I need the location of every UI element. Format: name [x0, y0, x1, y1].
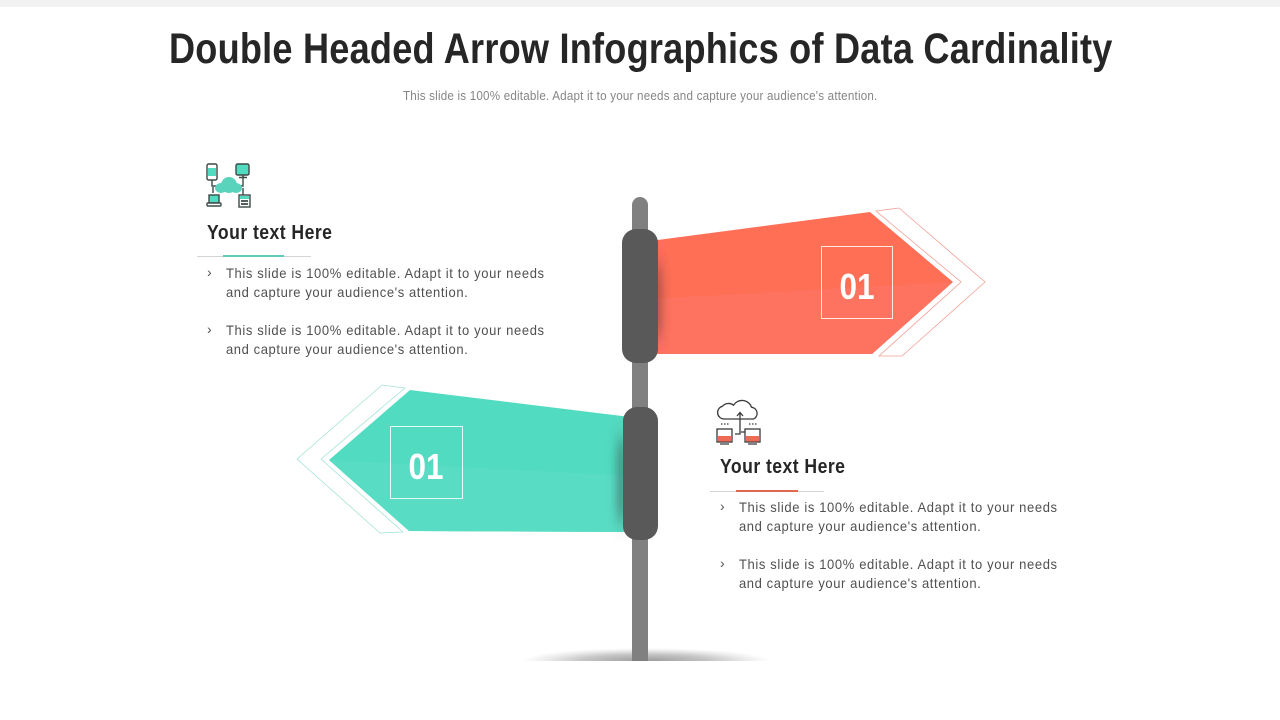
- subtitle: This slide is 100% editable. Adapt it to your needs and capture your audience's attention.: [403, 89, 877, 103]
- post clamp shadow: [654, 265, 668, 337]
- arrow body: [329, 390, 630, 532]
- arrow: left, teal 01: [297, 385, 658, 540]
- panel: bottom-right text: and capture your audience's attention.: [739, 519, 981, 534]
- arrow outline chevron: [876, 208, 985, 356]
- number box: [822, 246, 892, 318]
- panel: top-left text: and capture your audience's attention.: [226, 342, 468, 357]
- heading: Your text Here: [207, 221, 332, 243]
- icon: cloud with computers: [717, 400, 760, 444]
- divider: [197, 256, 311, 258]
- number box: [390, 426, 462, 498]
- bullet 1: ›: [207, 264, 212, 280]
- accent underline: [223, 255, 284, 257]
- top bar: [0, 0, 1280, 7]
- heading: Your text Here: [720, 455, 845, 477]
- arrow: right, orange 01: [622, 208, 985, 363]
- number: 01: [408, 446, 444, 487]
- arrow body: [650, 212, 953, 354]
- bullet 2: ›: [720, 555, 725, 571]
- panel: top-left text: and capture your audience's attention.: [226, 285, 468, 300]
- post clamp: [623, 407, 658, 540]
- divider: [710, 490, 824, 492]
- panel: top-left text: This slide is 100% editable. Adapt it to your needs: [226, 323, 544, 338]
- post clamp: [622, 229, 658, 363]
- bullet 2: ›: [207, 321, 212, 337]
- title: Double Headed Arrow Infographics of Data Cardinality: [169, 25, 1112, 73]
- bullet 1: ›: [720, 498, 725, 514]
- panel: top-left text: This slide is 100% editable. Adapt it to your needs: [226, 266, 544, 281]
- panel: top-left text: [197, 164, 544, 357]
- ground shadow: [522, 648, 770, 661]
- panel: bottom-right text: This slide is 100% editable. Adapt it to your needs: [739, 557, 1057, 572]
- icon: network cloud: [207, 164, 250, 207]
- post clamp shadow: [611, 440, 625, 520]
- number: 01: [840, 266, 874, 307]
- panel: bottom-right text: This slide is 100% editable. Adapt it to your needs: [739, 500, 1057, 515]
- signpost pole: [632, 197, 648, 661]
- panel: bottom-right text: and capture your audience's attention.: [739, 576, 981, 591]
- panel: bottom-right text: [710, 400, 1057, 591]
- arrow outline chevron: [297, 385, 405, 533]
- accent underline: [736, 490, 798, 492]
